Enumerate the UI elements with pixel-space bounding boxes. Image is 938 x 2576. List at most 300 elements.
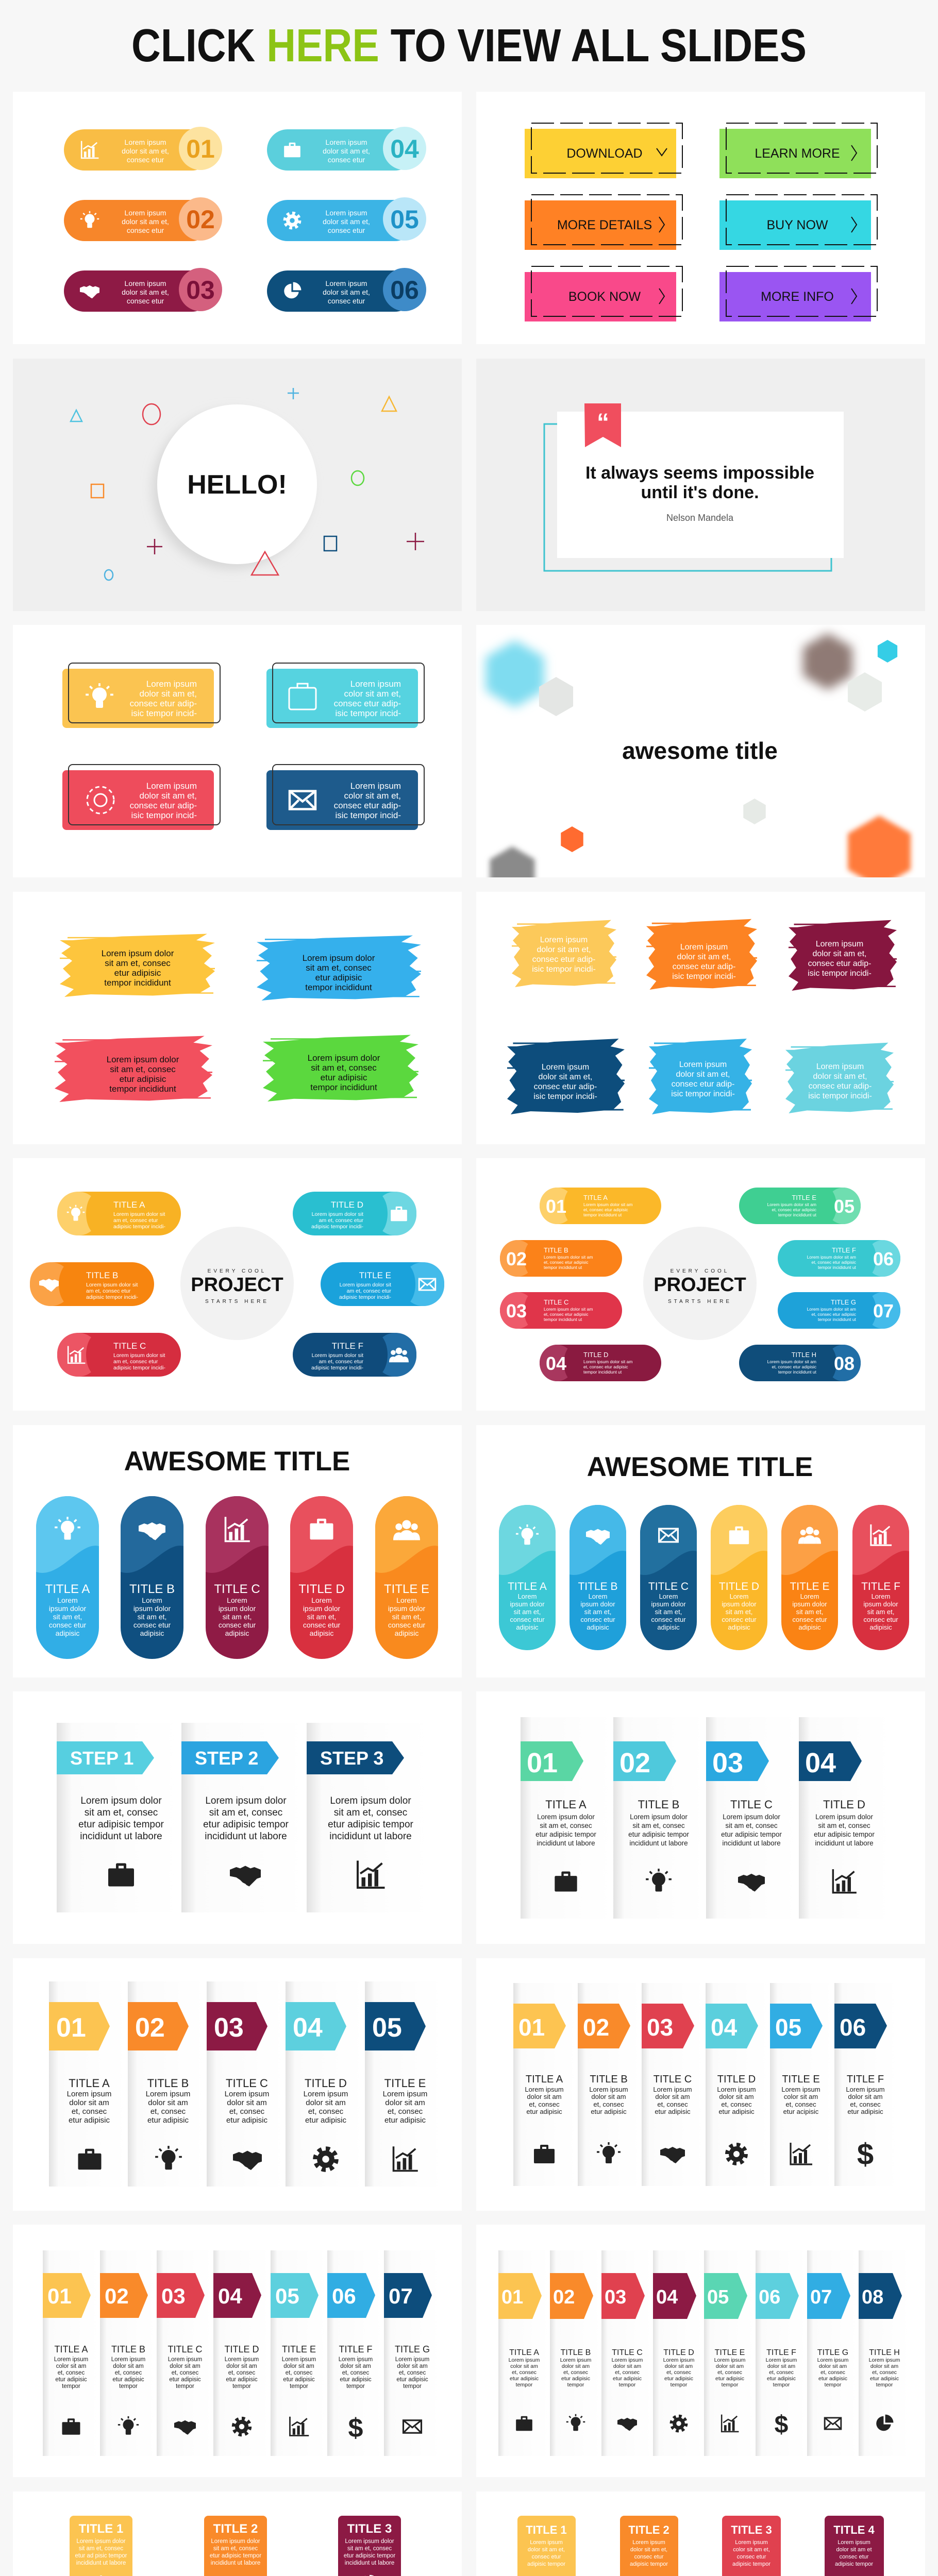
box: briefcase: isic tempor incid-	[335, 708, 401, 718]
step 01: sit am et, consec	[540, 1822, 592, 1829]
pill 03: TITLE C	[544, 1298, 568, 1306]
pill 02: 02	[506, 1248, 527, 1269]
column B: consec etur	[133, 1621, 171, 1629]
brush: blue: etur adipisic	[315, 973, 362, 982]
brush: navy: dolor sit am et,	[539, 1073, 592, 1081]
card: title 4: Lorem ipsum	[837, 2539, 870, 2546]
column 08	[859, 2250, 910, 2456]
quote card: It always seems impossible	[585, 463, 814, 483]
column 05: et, consec	[286, 2370, 312, 2376]
column 02	[128, 1981, 207, 2187]
column C	[206, 1496, 269, 1659]
pill: title C	[57, 1333, 181, 1377]
column A: adipisic	[56, 1629, 79, 1637]
pill 03: tempor incididunt ut	[544, 1317, 582, 1322]
column B: adipisic	[587, 1623, 609, 1631]
step 02: TITLE B	[638, 1798, 679, 1811]
column 02: TITLE B	[147, 2077, 189, 2090]
column 08: TITLE H	[869, 2348, 900, 2357]
pill: title E: TITLE E	[359, 1270, 391, 1280]
brush: yellow: dolor sit am et,	[537, 945, 591, 954]
column 02: dolor sit am	[562, 2363, 590, 2369]
pill 06	[778, 1240, 900, 1277]
pill 02	[64, 197, 222, 241]
step 04: Lorem ipsum dolor	[815, 1813, 873, 1821]
pill 07	[778, 1292, 900, 1329]
column B: sit am et,	[584, 1608, 611, 1616]
column 06: dolor sit am	[767, 2363, 795, 2369]
column 02: et, consec	[115, 2370, 142, 2376]
column D: consec etur	[303, 1621, 341, 1629]
column 04: dolor sit am	[719, 2093, 754, 2100]
step 04: TITLE D	[823, 1798, 865, 1811]
column C: TITLE C	[214, 1582, 260, 1596]
panel: quote	[476, 359, 925, 611]
step 02: Lorem ipsum dolor	[630, 1813, 688, 1821]
pill: title E: adipisic tempor incidi-	[339, 1294, 391, 1300]
box: envelope: color sit am et,	[344, 791, 401, 801]
pill 06: dolor sit am et,	[323, 288, 370, 296]
column E: TITLE E	[384, 1582, 429, 1596]
pill 04: Lorem ipsum dolor sit am	[583, 1359, 632, 1364]
pill 08: 08	[834, 1353, 855, 1374]
pill 03: Lorem ipsum	[125, 279, 166, 287]
pill 05	[267, 197, 426, 241]
column 04: et, consec	[228, 2370, 255, 2376]
pill 03	[64, 268, 222, 312]
pill 05: 05	[390, 205, 419, 234]
column 01: 01	[501, 2286, 523, 2308]
panel: six numbered pills	[13, 92, 462, 344]
column 03: et, consec	[615, 2369, 640, 2376]
pill 02: consec etur	[127, 226, 164, 234]
column 01: 01	[518, 2014, 545, 2041]
step 02: 02	[619, 1748, 650, 1778]
column 05: TITLE E	[282, 2344, 316, 2354]
column 02: Lorem ipsum	[111, 2357, 145, 2363]
column B: ipsum dolor	[133, 1604, 171, 1613]
column 03: 03	[647, 2014, 673, 2041]
pill 01: et, consec etur adipisic	[583, 1207, 628, 1212]
pill 03: 03	[186, 276, 215, 304]
brush: green: tempor incididunt	[310, 1082, 377, 1092]
card: title 1: etur ad pisic tempor	[75, 2553, 127, 2559]
column A: sit am et,	[514, 1608, 541, 1616]
column 01: et, consec	[529, 2100, 560, 2108]
column B: TITLE B	[578, 1581, 618, 1592]
brush: red: tempor incididunt	[109, 1084, 176, 1094]
column 05: TITLE E	[715, 2348, 745, 2357]
step 1	[57, 1723, 181, 1912]
button: download	[525, 123, 682, 178]
pill 02: dolor sit am et,	[122, 217, 169, 226]
brush: navy: isic tempor incidi-	[533, 1092, 597, 1101]
column 06: tempor	[773, 2382, 790, 2388]
column 02: 02	[583, 2014, 609, 2041]
step 03: incididunt ut labore	[722, 1839, 781, 1847]
column 02: Lorem ipsum	[589, 2086, 628, 2093]
column 03: 03	[605, 2286, 626, 2308]
brush: teal: consec etur adip-	[809, 1082, 872, 1091]
box: briefcase	[266, 663, 424, 728]
card: title 3: sit am et, consec	[347, 2546, 392, 2552]
column 02	[550, 2250, 601, 2456]
pill 07: Lorem ipsum dolor sit am	[807, 1307, 856, 1312]
quote card	[557, 403, 844, 558]
pill: title D: am et, consec etur	[319, 1217, 364, 1224]
step 01: TITLE A	[545, 1798, 587, 1811]
brush: maroon	[789, 920, 897, 991]
panel: five numbered columns	[13, 1958, 462, 2211]
pill: title F: Lorem ipsum dolor sit	[312, 1352, 363, 1359]
pill 05: et, consec etur adipisic	[772, 1207, 817, 1212]
column 07	[807, 2250, 859, 2456]
brush: blue: sit am et, consec	[306, 963, 372, 973]
center circle: project: STARTS HERE	[205, 1299, 269, 1304]
pill 05: Lorem ipsum dolor sit am	[767, 1202, 816, 1207]
brush: orange: dolor sit am et,	[677, 953, 731, 961]
column 03: etur adipisic	[169, 2377, 201, 2383]
column C: sit am et,	[655, 1608, 682, 1616]
pill 06: Lorem ipsum	[326, 279, 367, 287]
column 03: et, consec	[229, 2107, 265, 2116]
column B	[121, 1496, 183, 1659]
column 07	[384, 2250, 441, 2456]
column 04: etur adipisic	[226, 2377, 258, 2383]
pill 02	[500, 1240, 622, 1277]
pill 05: tempor incididunt ut	[778, 1212, 817, 1217]
card: title 2: Lorem ipsum	[632, 2539, 665, 2546]
pill 01: Lorem ipsum	[125, 138, 166, 146]
column 07: et, consec	[820, 2369, 845, 2376]
pill 02: TITLE B	[544, 1246, 568, 1254]
pill 08: Lorem ipsum dolor sit am	[767, 1359, 816, 1364]
column D	[711, 1505, 767, 1650]
step 3: etur adipisic tempor	[328, 1819, 414, 1830]
box: bulb	[62, 663, 220, 728]
brush: red: etur adipisic	[120, 1074, 166, 1084]
column D: adipisic	[728, 1623, 750, 1631]
step 2	[181, 1723, 307, 1912]
button: learn more: LEARN MORE	[755, 146, 840, 161]
step 03	[706, 1717, 799, 1919]
column 06: $	[348, 2413, 363, 2443]
step 04: incididunt ut labore	[815, 1839, 874, 1847]
center circle: project: STARTS HERE	[668, 1299, 732, 1304]
pill: title D	[293, 1192, 416, 1235]
step 2: Lorem ipsum dolor	[205, 1795, 287, 1806]
column 03: Lorem ipsum	[653, 2086, 692, 2093]
column 03: etur adipisic	[226, 2116, 268, 2125]
column 06: etur adipisic	[340, 2377, 372, 2383]
pill 01: tempor incididunt ut	[583, 1212, 622, 1217]
column 02: etur adipisic	[112, 2377, 144, 2383]
button: learn more	[719, 123, 877, 178]
pill 06: et, consec etur adipisic	[812, 1260, 857, 1265]
column 01: et, consec	[512, 2369, 537, 2376]
column E: consec etur	[388, 1621, 426, 1629]
pill 03: 03	[506, 1300, 527, 1321]
step 03: sit am et, consec	[725, 1822, 778, 1829]
panel: awesome title hexagons	[476, 625, 925, 877]
pill 04: Lorem ipsum	[326, 138, 367, 146]
step 3: STEP 3	[320, 1748, 383, 1769]
step 04: 04	[805, 1748, 836, 1778]
pill 08: et, consec etur adipisic	[772, 1364, 817, 1369]
pill 08	[739, 1345, 861, 1381]
pill 02: tempor incididunt ut	[544, 1265, 582, 1270]
pill 03: consec etur	[127, 297, 164, 305]
column 04: dolor sit am	[306, 2098, 346, 2107]
column 01: etur adipisic	[69, 2116, 110, 2125]
column 03: TITLE C	[612, 2348, 643, 2357]
column 03: dolor sit am	[170, 2363, 200, 2369]
column 01	[43, 2250, 100, 2456]
pill: title C: TITLE C	[113, 1341, 146, 1351]
pill 04: consec etur	[328, 156, 365, 164]
brush: blue	[649, 1039, 752, 1114]
brush: green: etur adipisic	[321, 1073, 367, 1082]
card: title 2: dolor sit am et,	[630, 2547, 667, 2553]
column B: TITLE B	[129, 1582, 175, 1596]
brush: navy: Lorem ipsum	[542, 1063, 589, 1072]
column B	[569, 1505, 626, 1650]
column A: TITLE A	[45, 1582, 90, 1596]
column 05: 05	[372, 2013, 402, 2043]
column 01: dolor sit am	[527, 2093, 562, 2100]
step 2: sit am et, consec	[209, 1807, 282, 1818]
pill 01: consec etur	[127, 156, 164, 164]
column 03	[157, 2250, 213, 2456]
card: title 4	[825, 2516, 884, 2576]
brush: yellow: etur adipisic	[114, 968, 161, 978]
card: title 4: dolor sit am et	[836, 2547, 872, 2553]
column C: consec etur	[219, 1621, 256, 1629]
panel: brush strokes six	[476, 892, 925, 1144]
column 01	[513, 1983, 578, 2186]
column 05: dolor sit am	[385, 2098, 425, 2107]
column 05	[271, 2250, 327, 2456]
brush: orange	[646, 919, 757, 990]
pill 07: tempor incididunt ut	[818, 1317, 857, 1322]
column 01: tempor	[62, 2383, 80, 2389]
column 04	[286, 1981, 365, 2187]
column 01	[498, 2250, 550, 2456]
box: gear	[62, 765, 220, 830]
pill 01	[64, 127, 222, 171]
pill 02: et, consec etur adipisic	[544, 1260, 589, 1265]
brush: blue: Lorem ipsum dolor	[303, 953, 375, 963]
panel: eight numbered columns	[476, 2225, 925, 2477]
box: bulb: dolor sit am et,	[139, 689, 197, 699]
brush: teal: isic tempor incidi-	[808, 1092, 872, 1100]
pill: title C: adipisic tempor incidi-	[113, 1365, 165, 1371]
column 02: Lorem ipsum	[146, 2090, 190, 2098]
column 01: dolor sit am	[69, 2098, 109, 2107]
column 01: TITLE A	[54, 2344, 88, 2354]
card: title 1	[517, 2516, 576, 2576]
brush: maroon: dolor sit am et,	[813, 950, 866, 958]
brush: teal	[785, 1043, 894, 1113]
column 03: tempor	[176, 2383, 194, 2389]
column 06: dolor sit am	[848, 2093, 883, 2100]
card: title 1: consec etur	[532, 2554, 561, 2560]
column 04: tempor	[671, 2382, 688, 2388]
pill: title C: am et, consec etur	[113, 1359, 158, 1365]
column E: sit am et,	[796, 1608, 823, 1616]
pill 06: 06	[390, 276, 419, 304]
pill: title E: Lorem ipsum dolor sit	[340, 1282, 391, 1288]
pill 05	[739, 1188, 861, 1224]
center circle: project: PROJECT	[654, 1274, 746, 1296]
button: more info: MORE INFO	[761, 290, 834, 304]
column D: Lorem	[730, 1592, 748, 1600]
column 06: 06	[840, 2014, 866, 2041]
column F: adipisic	[869, 1623, 892, 1631]
column 03: et, consec	[172, 2370, 198, 2376]
column F: consec etur	[863, 1616, 898, 1623]
step 1: etur adipisic tempor	[78, 1819, 164, 1830]
column 07: TITLE G	[395, 2344, 430, 2354]
pill 04: 04	[546, 1353, 566, 1374]
step 03: 03	[712, 1748, 743, 1778]
column C: adipisic	[225, 1629, 249, 1637]
step 03: etur adipisic tempor	[721, 1831, 782, 1838]
column 01: Lorem ipsum	[67, 2090, 111, 2098]
quote card: until it's done.	[641, 483, 759, 502]
column C: ipsum dolor	[651, 1600, 686, 1608]
pill 07: et, consec etur adipisic	[812, 1312, 857, 1317]
column 02: et, consec	[150, 2107, 186, 2116]
column 04	[653, 2250, 704, 2456]
step 01: 01	[527, 1748, 558, 1778]
column 06: et, consec	[769, 2369, 794, 2376]
column 02: dolor sit am	[113, 2363, 144, 2369]
column 07: Lorem ipsum	[395, 2357, 429, 2363]
column 08: tempor	[876, 2382, 893, 2388]
column 02: dolor sit am	[591, 2093, 626, 2100]
card: title 1: TITLE 1	[526, 2523, 567, 2536]
pill 04: et, consec etur adipisic	[583, 1364, 628, 1369]
pill 01: 01	[546, 1196, 566, 1217]
pill: title B	[30, 1262, 154, 1306]
card: title 3: TITLE 3	[347, 2522, 392, 2536]
column 03	[642, 1983, 706, 2186]
pill 07: TITLE G	[831, 1298, 856, 1306]
pill: title C: Lorem ipsum dolor sit	[113, 1352, 165, 1359]
column 05: etur adipisic	[384, 2116, 426, 2125]
pill: title B: am et, consec etur	[86, 1288, 131, 1294]
step 01: incididunt ut labore	[537, 1839, 595, 1847]
card: title 1: dolor sit am et,	[528, 2547, 565, 2553]
column 06: Lorem ipsum	[339, 2357, 373, 2363]
column 05: 05	[775, 2014, 801, 2041]
center circle: project: EVERY COOL	[671, 1268, 729, 1274]
button: more info	[719, 266, 877, 321]
button: buy now	[719, 195, 877, 250]
column 02: tempor	[567, 2382, 584, 2388]
column B: sit am et,	[138, 1613, 166, 1621]
column 03: etur adipisic	[613, 2376, 642, 2382]
column 02: et, consec	[563, 2369, 588, 2376]
step 04	[799, 1717, 892, 1919]
pill: title D: Lorem ipsum dolor sit	[312, 1211, 363, 1217]
card: title 4: consec etur	[840, 2554, 869, 2560]
column 06	[834, 1983, 898, 2186]
card: title 3	[338, 2516, 401, 2576]
column C: ipsum dolor	[219, 1604, 256, 1613]
column 03	[207, 1981, 286, 2187]
column C	[640, 1505, 697, 1650]
card: title 2: TITLE 2	[628, 2523, 669, 2536]
column 04	[706, 1983, 770, 2186]
panel: awesome title five columns	[13, 1425, 462, 1677]
brush: orange: isic tempor incidi-	[672, 972, 736, 981]
column 05: Lorem ipsum	[714, 2357, 746, 2363]
card: title 2: adipisic tempor	[630, 2561, 668, 2567]
column 01: etur adipisic	[526, 2108, 562, 2115]
column 07: dolor sit am	[819, 2363, 847, 2369]
column 04: TITLE D	[663, 2348, 694, 2357]
pill 02: 02	[186, 205, 215, 234]
pill: title F: adipisic tempor incidi-	[311, 1365, 363, 1371]
hello circle: HELLO!	[187, 470, 287, 500]
column 01: TITLE A	[526, 2074, 563, 2085]
column 07: 07	[810, 2286, 832, 2308]
center circle: project	[643, 1227, 757, 1340]
column 03	[601, 2250, 653, 2456]
pill: title F	[293, 1333, 416, 1377]
column 05: TITLE E	[384, 2077, 426, 2090]
column 06: Lorem ipsum	[846, 2086, 885, 2093]
panel: project with eight numbered pills	[476, 1158, 925, 1411]
column 01: color sit am	[56, 2363, 86, 2369]
column E: consec etur	[792, 1616, 827, 1623]
column 03: etur adipisic	[655, 2108, 691, 2115]
column 01: TITLE A	[509, 2348, 539, 2357]
pill 06: consec etur	[328, 297, 365, 305]
column 04: etur adipisic	[305, 2116, 347, 2125]
column 06: et, consec	[342, 2370, 369, 2376]
step 02: etur adipisic tempor	[628, 1831, 689, 1838]
column C: consec etur	[651, 1616, 686, 1623]
column 06: et, consec	[850, 2100, 881, 2108]
brush: green: Lorem ipsum dolor	[308, 1053, 380, 1063]
box: gear: isic tempor incid-	[131, 810, 197, 820]
button: more details	[525, 195, 682, 250]
brush: yellow: Lorem ipsum dolor	[102, 948, 174, 958]
column 05: et, consec	[388, 2107, 423, 2116]
card: title 1: incididunt ut labore	[76, 2560, 126, 2566]
column A: TITLE A	[508, 1581, 547, 1592]
panel: outlined icon boxes	[13, 625, 462, 877]
pill 08: TITLE H	[792, 1351, 816, 1359]
pill: title B: adipisic tempor incidi-	[86, 1294, 138, 1300]
pill: title E: am et, consec etur	[347, 1288, 392, 1294]
column 05: tempor	[290, 2383, 308, 2389]
column 06	[327, 2250, 384, 2456]
button: book now: BOOK NOW	[568, 290, 641, 304]
column 07: dolor sit am	[397, 2363, 428, 2369]
box: bulb: isic tempor incid-	[131, 708, 197, 718]
button: more details: MORE DETAILS	[557, 218, 652, 232]
card: title 2	[620, 2516, 678, 2576]
pill 03: dolor sit am et,	[122, 288, 169, 296]
card: title 2: TITLE 2	[213, 2522, 258, 2536]
column B: consec etur	[580, 1616, 615, 1623]
step 3: Lorem ipsum dolor	[330, 1795, 411, 1806]
column B: adipisic	[140, 1629, 164, 1637]
